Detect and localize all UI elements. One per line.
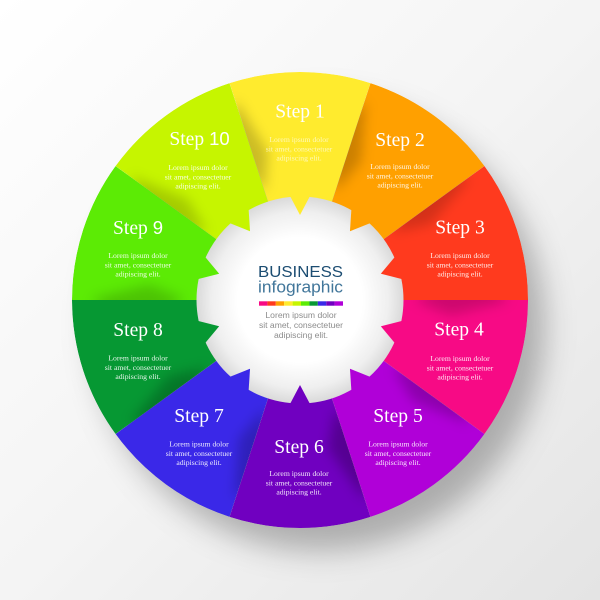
panel: step 7 [116, 361, 268, 517]
panel: step 5 [332, 361, 484, 517]
wedge: step 2 [332, 83, 484, 239]
panel: step 6 [230, 398, 370, 528]
text: step 4: Lorem ipsum dolor [430, 354, 490, 363]
text: step 3: Lorem ipsum dolor [430, 251, 490, 260]
wedge: step 9 [72, 166, 216, 300]
panel: step 8 [72, 300, 216, 434]
center text: Lorem ipsum dolor [265, 310, 337, 320]
wedge: step 8 [72, 300, 216, 434]
text: step 8: Lorem ipsum dolor [108, 354, 168, 362]
text: step 1: adipiscing elit. [276, 154, 322, 163]
heading: step 5: Step 5 [373, 406, 423, 427]
heading: step 2: Step 2 [375, 130, 425, 151]
heading: step 10: Step 10 [169, 128, 230, 150]
heading: step 7: Step 7 [174, 406, 224, 427]
heading: step 6: Step 6 [274, 437, 324, 458]
text: step 3: adipiscing elit. [437, 270, 483, 279]
text: step 6: adipiscing elit. [276, 488, 322, 497]
heading: step 1: Step 1 [275, 102, 325, 122]
panel: step 4 [384, 300, 528, 434]
center text: sit amet, consectetuer [259, 320, 343, 330]
heading: step 4: Step 4 [434, 320, 484, 340]
text: step 7: adipiscing elit. [176, 458, 222, 467]
panel: step 1 [230, 72, 370, 202]
text: step 8: adipiscing elit. [115, 372, 161, 381]
text: step 1: sit amet, consectetuer [266, 144, 333, 153]
center text: adipiscing elit. [274, 330, 328, 340]
center title [258, 264, 344, 296]
text: step 8: sit amet, consectetuer [105, 363, 172, 372]
text: step 2: Lorem ipsum dolor [370, 162, 430, 171]
text: step 1: Lorem ipsum dolor [269, 135, 329, 144]
wedge: step 3 [384, 166, 528, 300]
panel: step 10 [116, 83, 268, 239]
text: step 2: sit amet, consectetuer [367, 171, 434, 180]
panel: step 2 [332, 83, 484, 239]
text: step 9: adipiscing elit. [115, 270, 161, 279]
text: step 7: Lorem ipsum dolor [169, 440, 229, 448]
disc drop shadow [93, 99, 545, 551]
text: step 3: sit amet, consectetuer [427, 260, 494, 269]
wedge: step 7 [116, 361, 268, 517]
text: step 4: sit amet, consectetuer [427, 363, 494, 372]
center title: infographic [258, 278, 344, 296]
wedge: step 5 [332, 361, 484, 517]
text: step 5: sit amet, consectetuer [365, 449, 432, 458]
text: step 6: Lorem ipsum dolor [269, 469, 329, 478]
wedge: step 10 [116, 83, 268, 239]
panel: step 3 [384, 166, 528, 300]
text: step 6: sit amet, consectetuer [266, 478, 333, 487]
text: step 9: Lorem ipsum dolor [108, 251, 168, 260]
text: step 2: adipiscing elit. [377, 181, 423, 190]
wedge: step 4 [384, 300, 528, 434]
heading: step 3: Step 3 [435, 218, 485, 238]
text: step 10: sit amet, consectetuer [165, 172, 232, 181]
text: step 7: sit amet, consectetuer [166, 449, 233, 458]
heading: step 9: Step 9 [113, 217, 163, 239]
text: step 10: adipiscing elit. [175, 182, 221, 191]
wedge: step 6 [230, 398, 370, 528]
text: step 9: sit amet, consectetuer [105, 260, 172, 269]
text: step 5: Lorem ipsum dolor [368, 440, 428, 448]
rainbow bar [259, 301, 343, 306]
center gear [196, 196, 404, 404]
text: step 5: adipiscing elit. [375, 458, 421, 467]
text: step 4: adipiscing elit. [437, 373, 483, 382]
heading: step 8: Step 8 [113, 320, 163, 341]
text: step 10: Lorem ipsum dolor [168, 163, 228, 172]
panel: step 9 [72, 166, 216, 300]
wedge: step 1 [230, 72, 370, 202]
center title: BUSINESS [258, 264, 343, 281]
